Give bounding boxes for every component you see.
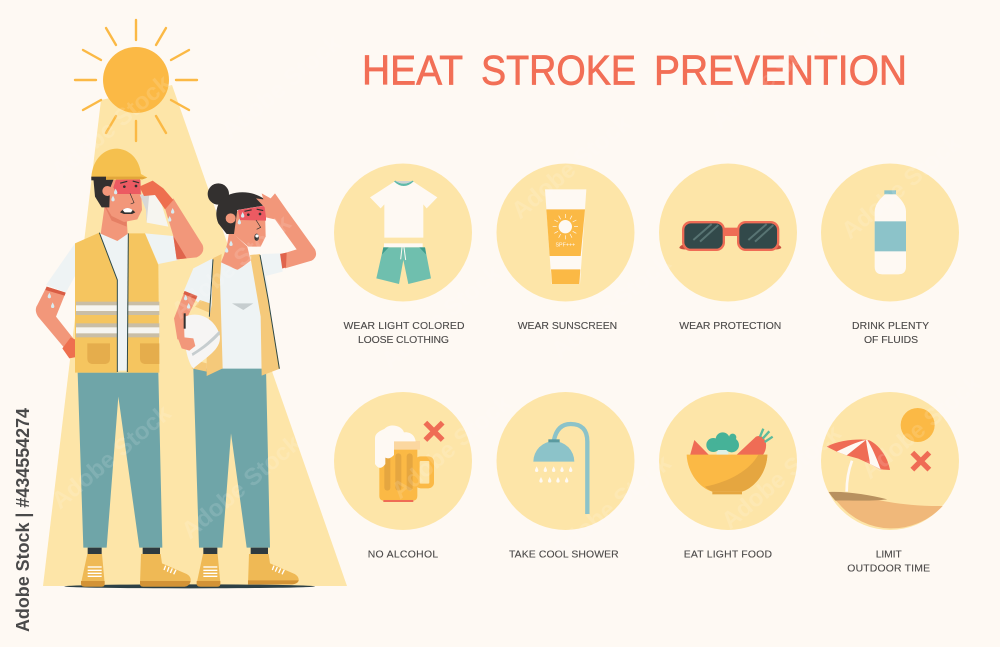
icon: sun (75, 20, 197, 141)
hair (93, 178, 114, 207)
vest (192, 254, 280, 376)
left sleeve (46, 243, 78, 292)
stock image id: Adobe Stock | #434554274 (13, 408, 33, 632)
illustration: female worker (174, 183, 316, 376)
text: Adobe Stock (377, 259, 507, 375)
sun light beam (43, 85, 347, 586)
neck (220, 230, 251, 270)
raised arm (275, 210, 316, 268)
text: Adobe Stock (47, 69, 177, 185)
ear (102, 186, 112, 196)
sweat drops (48, 189, 174, 308)
illustration: legs and boots (64, 368, 315, 588)
head (105, 180, 142, 222)
man's trousers (78, 373, 162, 548)
eyes, brows and nose (120, 180, 139, 204)
panel: take cool shower (496, 392, 634, 561)
label: WEAR LIGHT COLORED (344, 321, 464, 332)
icon: beach scene (827, 408, 943, 528)
title (362, 46, 907, 94)
text: Adobe Stock (547, 449, 677, 565)
label (847, 550, 930, 575)
text: Adobe Stock (177, 429, 307, 545)
label: WEAR SUNSCREEN (518, 321, 617, 332)
text: Adobe Stock (547, 249, 677, 365)
panel: no alcohol (334, 392, 472, 561)
hand on forehead (139, 181, 173, 209)
panel: wear sunscreen (496, 164, 634, 332)
text: Adobe Stock (47, 399, 177, 515)
hand shielding eyes (256, 193, 287, 220)
label: TAKE COOL SHOWER (509, 550, 619, 561)
label: NO ALCOHOL (368, 550, 438, 561)
label: LOOSE CLOTHING (358, 335, 449, 346)
text: Adobe Stock (387, 389, 517, 505)
title: PREVENTION (654, 46, 907, 94)
label (344, 321, 464, 346)
raised arm (165, 198, 203, 259)
panel: eat light food (659, 392, 797, 561)
title: STROKE (481, 46, 636, 94)
lower arm (174, 291, 197, 339)
mouth (254, 234, 259, 241)
icon: sunglasses (679, 221, 781, 251)
label: WEAR PROTECTION (679, 321, 781, 332)
panel: wear protection (659, 164, 797, 332)
boots (81, 554, 299, 587)
icon: beer mug with cross (375, 423, 443, 502)
text: Adobe Stock (837, 129, 967, 245)
text: Adobe Stock (707, 19, 837, 135)
towel (140, 190, 168, 227)
left hand (62, 337, 97, 360)
label: OUTDOOR TIME (847, 564, 930, 575)
text: Adobe Stock (717, 419, 847, 535)
ground shadow (64, 584, 315, 588)
mouth (120, 208, 135, 214)
icon: sunscreen tube (545, 189, 586, 284)
right sleeve (145, 233, 178, 264)
label: EAT LIGHT FOOD (684, 550, 772, 561)
hand on helmet (177, 337, 195, 351)
neck (101, 203, 128, 242)
vest (75, 233, 159, 373)
text: Adobe Stock (167, 209, 297, 325)
socks (88, 548, 268, 554)
panel: wear light colored loose clothing (334, 164, 472, 346)
hair and bun (208, 183, 265, 234)
label: OF FLUIDS (864, 335, 918, 346)
helmet (184, 315, 220, 369)
hard hat (91, 149, 147, 180)
red flushed band (238, 205, 266, 221)
red flushed band (113, 179, 141, 194)
icon: water bottle (875, 190, 906, 274)
ear (226, 213, 236, 223)
label: DRINK PLENTY (852, 321, 929, 332)
sweat drops (184, 212, 244, 309)
t-shirt (100, 233, 128, 371)
woman's trousers (193, 368, 270, 548)
title: HEAT (362, 46, 463, 94)
label: LIMIT (876, 550, 902, 561)
head (232, 208, 266, 247)
illustration: male worker (36, 149, 203, 373)
icon: sunscreen tube: SPF+++ (555, 242, 575, 248)
icon: t-shirt and shorts (370, 181, 437, 284)
text: Adobe Stock (507, 109, 637, 225)
icon: shower head (533, 424, 587, 514)
shirt body (184, 255, 268, 369)
text: Adobe Stock (217, 29, 347, 145)
eyes, brows and nose (244, 209, 263, 229)
label (852, 321, 929, 346)
panel: limit outdoor time (821, 392, 959, 575)
panel: drink plenty of fluids (821, 164, 959, 346)
left arm (36, 287, 74, 350)
text: Adobe Stock (857, 369, 987, 485)
icon: food bowl (687, 429, 773, 494)
